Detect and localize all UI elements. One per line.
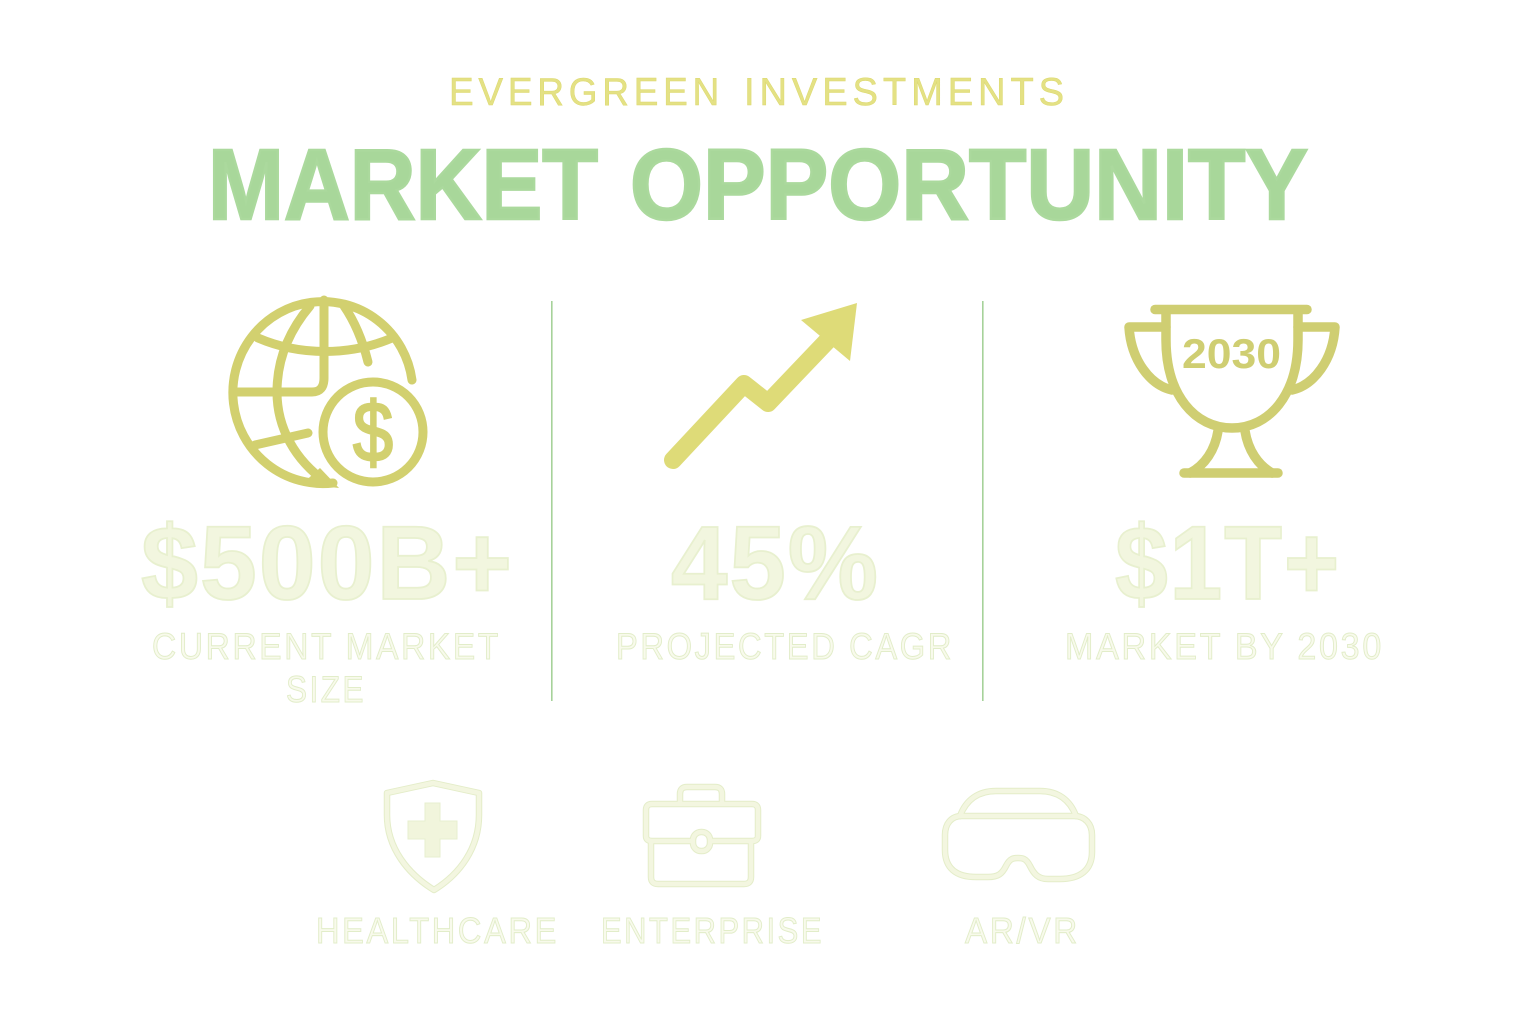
sector label: enterprise: ENTERPRISE bbox=[601, 910, 824, 951]
icon: trophy 2030 bbox=[1129, 310, 1335, 473]
title: Market Opportunity bbox=[208, 129, 1308, 241]
title: Market Opportunity: OPPORTUNITY bbox=[630, 129, 1308, 241]
panel: market by 2030 bbox=[1065, 310, 1384, 667]
divider left bbox=[551, 301, 553, 701]
sector label: AR/VR: AR/VR bbox=[965, 910, 1080, 951]
stat value: 45%: 45% bbox=[671, 505, 880, 622]
header eyebrow: Evergreen Investments: EVERGREEN bbox=[449, 71, 724, 114]
sector: enterprise bbox=[601, 787, 824, 951]
icon glyph: dollar sign: $ bbox=[353, 385, 393, 479]
panel: projected CAGR bbox=[616, 303, 954, 667]
icon: shield with cross bbox=[387, 783, 479, 890]
trophy engraving: 2030: 2030 bbox=[1182, 330, 1281, 377]
sector label: healthcare: HEALTHCARE bbox=[316, 910, 559, 951]
panel: current market size bbox=[141, 300, 514, 710]
stat label: current market size bbox=[152, 625, 501, 710]
stat label: projected CAGR: PROJECTED CAGR bbox=[616, 625, 954, 667]
stat label: current market size: CURRENT MARKET bbox=[152, 625, 501, 667]
title: Market Opportunity: MARKET bbox=[208, 129, 598, 241]
icon: rising arrow bbox=[673, 303, 857, 460]
stat label: current market size: SIZE bbox=[286, 668, 366, 710]
divider right bbox=[982, 301, 984, 701]
sector: healthcare bbox=[316, 783, 559, 951]
icon: VR headset bbox=[945, 791, 1092, 879]
header eyebrow: Evergreen Investments bbox=[449, 71, 1069, 114]
stat value: $1T+: $1T+ bbox=[1115, 505, 1341, 622]
header eyebrow: Evergreen Investments: INVESTMENTS bbox=[744, 71, 1069, 114]
sector: AR/VR bbox=[945, 791, 1092, 951]
icon: briefcase bbox=[646, 787, 758, 884]
icon: globe with dollar coin bbox=[233, 300, 423, 488]
stat value: $500B+: $500B+ bbox=[141, 505, 514, 622]
stat label: market by 2030: MARKET BY 2030 bbox=[1065, 625, 1384, 667]
